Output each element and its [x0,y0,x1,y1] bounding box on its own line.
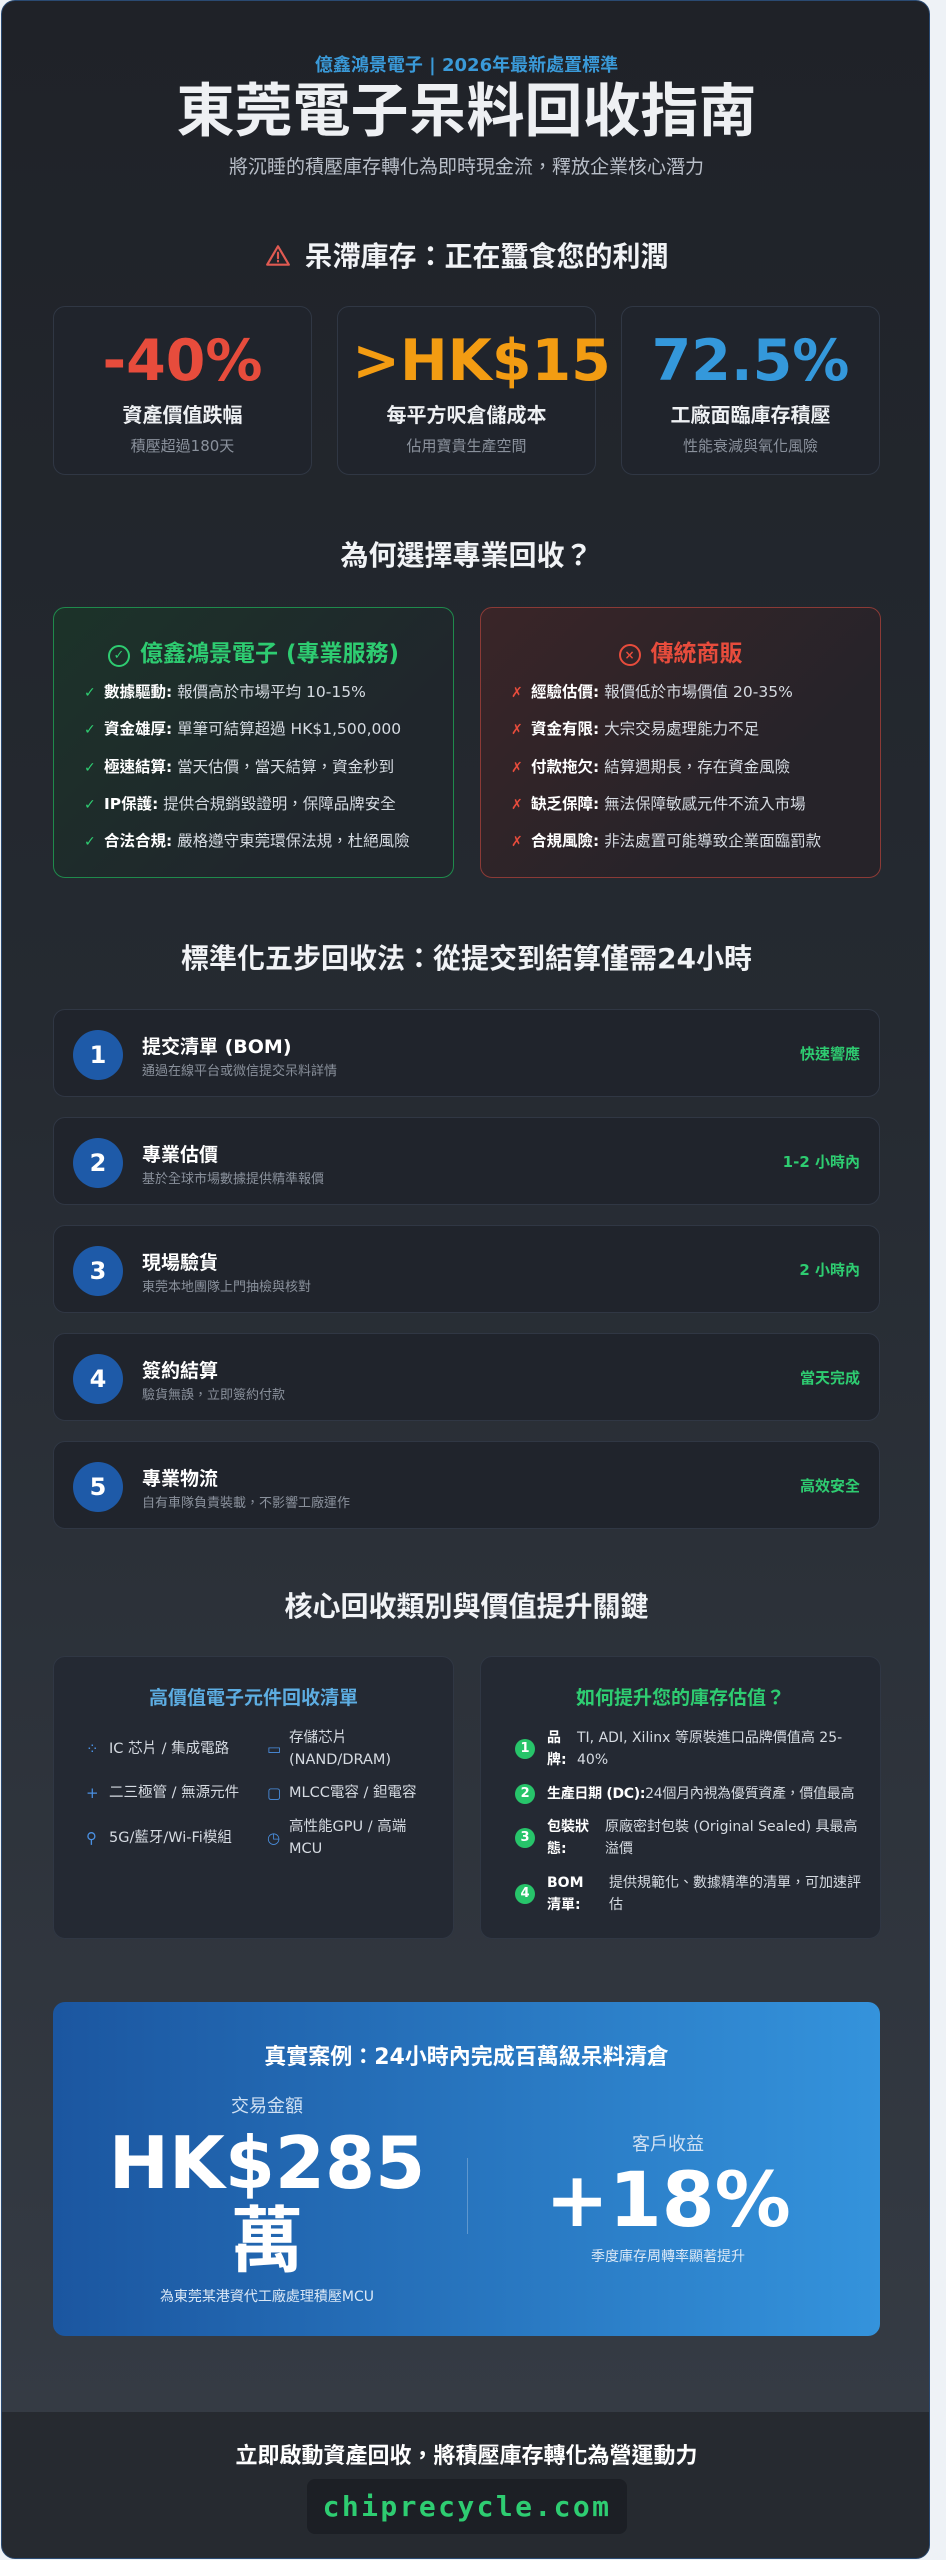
case left metric: 為東莞某港資代工廠處理積壓MCU [160,2289,374,2305]
stat card: -40%: -40% [102,328,263,394]
step 2: 1-2 小時內 [783,1153,860,1171]
stat card: -40%: 資產價值跌幅 [122,403,242,427]
panel: traditional dealers: ✗ [511,834,523,850]
case right metric: 客戶收益 [632,2134,704,2155]
case study box [53,2002,880,2336]
case left metric: 交易金額 [231,2096,303,2117]
step 4: 當天完成 [800,1369,860,1387]
panel: traditional dealers: 付款拖欠: 結算週期長，存在資金風險 [531,758,790,776]
step 5 [53,1441,880,1529]
panel: traditional dealers: 缺乏保障: 無法保障敏感元件不流入市場 [531,795,806,813]
section heading: core categories: 核心回收類別與價值提升關鍵 [284,1590,648,1623]
panel: how to raise valuation: 如何提升您的庫存估值？ [576,1687,785,1709]
panel: traditional dealers: 傳統商販 [650,641,742,667]
section heading: stagnant inventory: 呆滯庫存：正在蠶食您的利潤 [304,240,668,273]
panel: high-value component list: ⚲ [86,1829,97,1847]
panel: how to raise valuation: 4 [520,1886,530,1901]
step 4: 4 [90,1365,106,1393]
panel: how to raise valuation: TI, ADI, Xilinx 等原裝進口品牌價值高 25-40% [577,1730,842,1768]
panel: how to raise valuation: 原廠密封包裝 (Original Sealed) 具最高溢價 [605,1819,858,1857]
panel: how to raise valuation: 3 [520,1830,530,1845]
panel: how to raise valuation: 包裝狀態: [547,1819,589,1857]
panel: professional service: ✓ [84,760,96,776]
panel: professional service: ✓ [84,834,96,850]
title: 東莞電子呆料回收指南 [176,77,756,145]
step 4: 驗貨無誤，立即簽約付款 [142,1388,285,1403]
panel: traditional dealers: ✗ [511,722,523,738]
step 2 [53,1117,880,1205]
panel: high-value component list: ▢ [267,1784,281,1802]
panel: high-value component list: ◷ [267,1829,280,1847]
step 4 [53,1333,880,1421]
panel: professional service [53,607,454,878]
panel: how to raise valuation: 品牌: [547,1730,567,1768]
panel: high-value component list: 5G/藍牙/Wi-Fi模組 [109,1830,232,1846]
step 1: 通過在線平台或微信提交呆料詳情 [142,1064,337,1079]
stat card: 72.5%: 工廠面臨庫存積壓 [670,403,830,427]
step 5: 專業物流 [142,1468,218,1490]
panel: high-value component list: 高價值電子元件回收清單 [149,1687,358,1709]
panel: professional service: ✓ [114,648,124,663]
stat card: 72.5% [621,306,880,475]
step 2: 專業估價 [142,1144,218,1166]
stat card: HK$15: 每平方呎倉儲成本 [386,403,546,427]
stat card: HK$15: 佔用寶貴生產空間 [406,437,526,455]
step 1: 提交清單 (BOM) [142,1036,292,1058]
step 3: 3 [90,1257,106,1285]
panel: traditional dealers: ✗ [511,797,523,813]
panel: traditional dealers: 合規風險: 非法處置可能導致企業面臨罰款 [531,832,821,850]
panel: high-value component list: 二三極管 / 無源元件 [109,1785,239,1801]
panel: professional service: 極速結算: 當天估價，當天結算，資金秒到 [104,758,394,776]
stat card: 72.5%: 72.5% [652,328,849,394]
panel: traditional dealers: ✗ [511,685,523,701]
section heading: why professional: 為何選擇專業回收？ [340,539,592,572]
case right metric: +18% [545,2155,791,2244]
domain box [307,2479,627,2534]
step 5: 自有車隊負責裝載，不影響工廠運作 [142,1496,350,1511]
step 3 [53,1225,880,1313]
panel: professional service: ✓ [84,722,96,738]
stat card: -40% [53,306,312,475]
case left metric: 萬 [231,2199,303,2283]
step 3: 現場驗貨 [142,1252,218,1274]
tagline: 將沉睡的積壓庫存轉化為即時現金流，釋放企業核心潛力 [229,156,704,178]
panel: high-value component list [53,1656,454,1939]
case left metric [109,2096,425,2305]
step 5: 5 [90,1473,106,1501]
panel: how to raise valuation: 2 [521,1786,529,1801]
footer band [2,2412,931,2560]
step 3: 2 小時內 [799,1261,860,1279]
step 2: 基於全球市場數據提供精準報價 [142,1172,324,1187]
panel: professional service: 合法合規: 嚴格遵守東莞環保法規，杜絕風險 [104,832,410,850]
step 1: 1 [90,1041,106,1069]
step 1 [53,1009,880,1097]
panel: traditional dealers: ✗ [511,760,523,776]
panel: how to raise valuation: 生產日期 (DC):24個月內視為優質資產，價值最高 [547,1786,854,1802]
case right metric [545,2134,791,2265]
panel: professional service: ✓ [84,685,96,701]
panel: how to raise valuation: BOM清單: [547,1875,584,1913]
panel: high-value component list: ⁘ [86,1740,99,1758]
panel: professional service: ✓ [84,797,96,813]
case left metric: HK$285 [109,2121,425,2205]
step 4: 簽約結算 [142,1360,218,1382]
case title: 真實案例：24小時內完成百萬級呆料清倉 [264,2045,669,2070]
panel: high-value component list: MLCC電容 / 鉭電容 [289,1785,416,1801]
panel: how to raise valuation: 1 [520,1741,530,1756]
header subtitle: 億鑫鴻景電子 | 2026年最新處置標準 [315,55,618,76]
stat card: 72.5%: 性能衰減與氧化風險 [683,437,818,455]
panel: traditional dealers: 資金有限: 大宗交易處理能力不足 [531,720,759,738]
section heading: five steps: 標準化五步回收法：從提交到結算僅需24小時 [181,942,752,975]
panel: high-value component list: 高性能GPU / 高端 [289,1819,406,1835]
panel: high-value component list: ▭ [267,1740,281,1758]
footer call to action: 立即啟動資產回收，將積壓庫存轉化為營運動力 [235,2444,698,2469]
stat card: HK$15 [337,306,596,475]
panel: traditional dealers [480,607,881,878]
panel: professional service: 資金雄厚: 單筆可結算超過 HK$1,500,000 [104,720,401,738]
stat card: HK$15: >HK$15 [352,328,611,394]
panel: professional service: 億鑫鴻景電子 (專業服務) [140,641,399,667]
step 3: 東莞本地團隊上門抽檢與核對 [142,1280,311,1295]
panel: professional service: IP保護: 提供合規銷毀證明，保障品牌安全 [104,795,396,813]
panel: traditional dealers: 經驗估價: 報價低於市場價值 20-35% [531,683,793,701]
panel: how to raise valuation [480,1656,881,1939]
step 2: 2 [90,1149,106,1177]
step 1: 快速響應 [800,1045,860,1063]
panel: professional service: 數據驅動: 報價高於市場平均 10-15% [104,683,366,701]
panel: high-value component list: (NAND/DRAM) [289,1752,391,1768]
stat card: -40%: 積壓超過180天 [131,437,234,455]
panel: traditional dealers: × [624,648,635,662]
step 5: 高效安全 [800,1477,860,1495]
domain box: chiprecycle.com [323,2490,611,2523]
panel: high-value component list: MCU [289,1841,322,1857]
panel: how to raise valuation: 提供規範化、數據精準的清單，可加速評估 [609,1875,861,1913]
panel: high-value component list: + [86,1784,99,1802]
panel: high-value component list: 存儲芯片 [289,1730,347,1746]
panel: high-value component list: IC 芯片 / 集成電路 [109,1741,229,1757]
divider [467,2158,468,2234]
case right metric: 季度庫存周轉率顯著提升 [591,2249,745,2265]
